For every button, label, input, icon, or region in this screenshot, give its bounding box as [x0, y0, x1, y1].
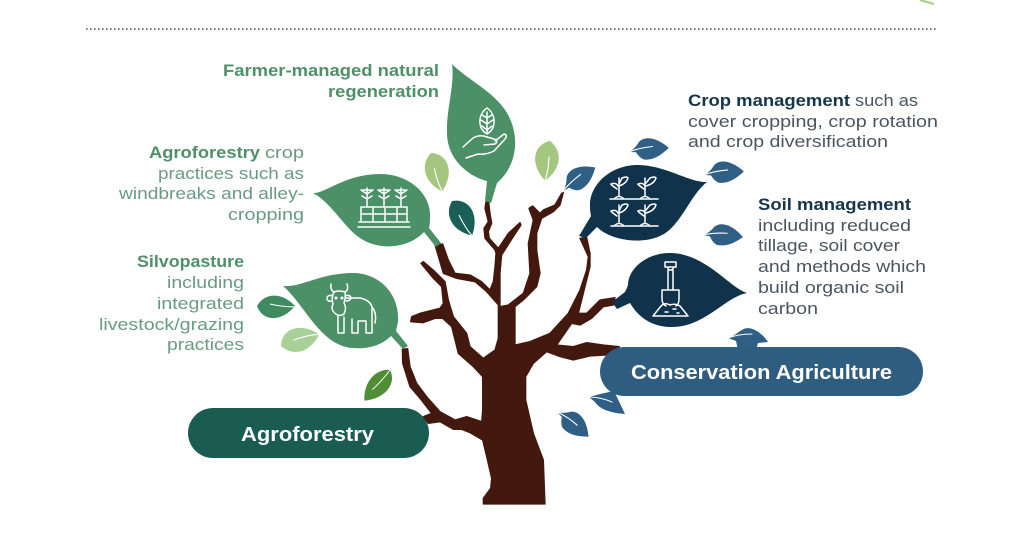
- dotted divider: [86, 28, 938, 30]
- text: crop management: Crop management: [688, 91, 850, 110]
- text: soil management: Soil management: [758, 195, 911, 214]
- small leaf: mid green: [257, 296, 295, 318]
- small leaf: light green left: [421, 149, 454, 194]
- text: crop management: such as: [855, 91, 918, 110]
- text: silvopasture: integrated: [157, 294, 244, 313]
- text: silvopasture: Silvopasture: [137, 252, 244, 271]
- text: agroforestry crop practices: crop: [265, 143, 304, 162]
- text: agroforestry crop practices: [118, 143, 304, 224]
- small leaf: pale green: [277, 322, 322, 356]
- small leaf: blue middle right: [703, 223, 744, 247]
- leaf: agroforestry crop practices: [313, 174, 441, 247]
- text: soil management: and methods which: [758, 257, 926, 276]
- text: agroforestry crop practices: practices such as: [158, 164, 304, 183]
- label: conservation agriculture pill: [600, 347, 923, 396]
- small leaf: blue near branch: [556, 158, 601, 199]
- leaf: crop management: [579, 165, 707, 241]
- text: agroforestry crop practices: windbreaks and alley-: [118, 184, 304, 203]
- text: farmer-managed natural regeneration: regeneration: [328, 82, 439, 101]
- text: agroforestry crop practices: cropping: [228, 205, 304, 224]
- text: soil management: [758, 195, 926, 318]
- small leaf: blue top: [628, 136, 670, 161]
- text: soil management: build organic soil: [758, 278, 904, 297]
- icon: shovel: [653, 262, 688, 316]
- cropped leaf at top edge: [920, 0, 934, 4]
- icon: planter with seedlings: [358, 188, 410, 227]
- label: agroforestry pill: [188, 408, 429, 458]
- small leaf: light green right: [532, 139, 561, 182]
- text: crop management: cover cropping, crop rotation: [688, 112, 938, 131]
- text: silvopasture: including: [167, 273, 244, 292]
- small leaf: dark teal: [443, 195, 483, 241]
- panel: conservation agriculture leaves: [551, 136, 768, 444]
- text: crop management: [688, 91, 938, 151]
- panel: agroforestry leaves: [257, 64, 561, 408]
- small leaf: blue under pill: [589, 391, 625, 414]
- text: farmer-managed natural regeneration: Farmer-managed natural: [223, 61, 439, 80]
- icon: cow: [327, 284, 376, 333]
- text: crop management: and crop diversification: [688, 132, 888, 151]
- text: silvopasture: [99, 252, 244, 354]
- small leaf: blue on pill: [728, 328, 768, 350]
- text: soil management: tillage, soil cover: [758, 236, 900, 255]
- tree trunk and branches: [402, 193, 619, 504]
- text: silvopasture: livestock/grazing: [99, 315, 244, 334]
- text: farmer-managed natural regeneration: [223, 61, 439, 101]
- label: agroforestry pill: Agroforestry: [241, 424, 375, 446]
- icon: hand holding leaf: [463, 108, 506, 158]
- text: agroforestry crop practices: Agroforestry: [149, 143, 261, 162]
- leaf: farmer-managed natural regeneration: [447, 64, 515, 203]
- leaf: silvopasture: [283, 273, 408, 349]
- text: soil management: including reduced: [758, 216, 911, 235]
- text: soil management: carbon: [758, 299, 818, 318]
- label: conservation agriculture pill: Conservation Agriculture: [631, 362, 892, 384]
- text: silvopasture: practices: [167, 335, 244, 354]
- icon: seedlings: [610, 177, 658, 226]
- small leaf: blue lower: [551, 403, 596, 444]
- small leaf: bright green: [357, 364, 398, 408]
- small leaf: blue upper right: [703, 160, 745, 184]
- leaf: soil management: [612, 253, 747, 327]
